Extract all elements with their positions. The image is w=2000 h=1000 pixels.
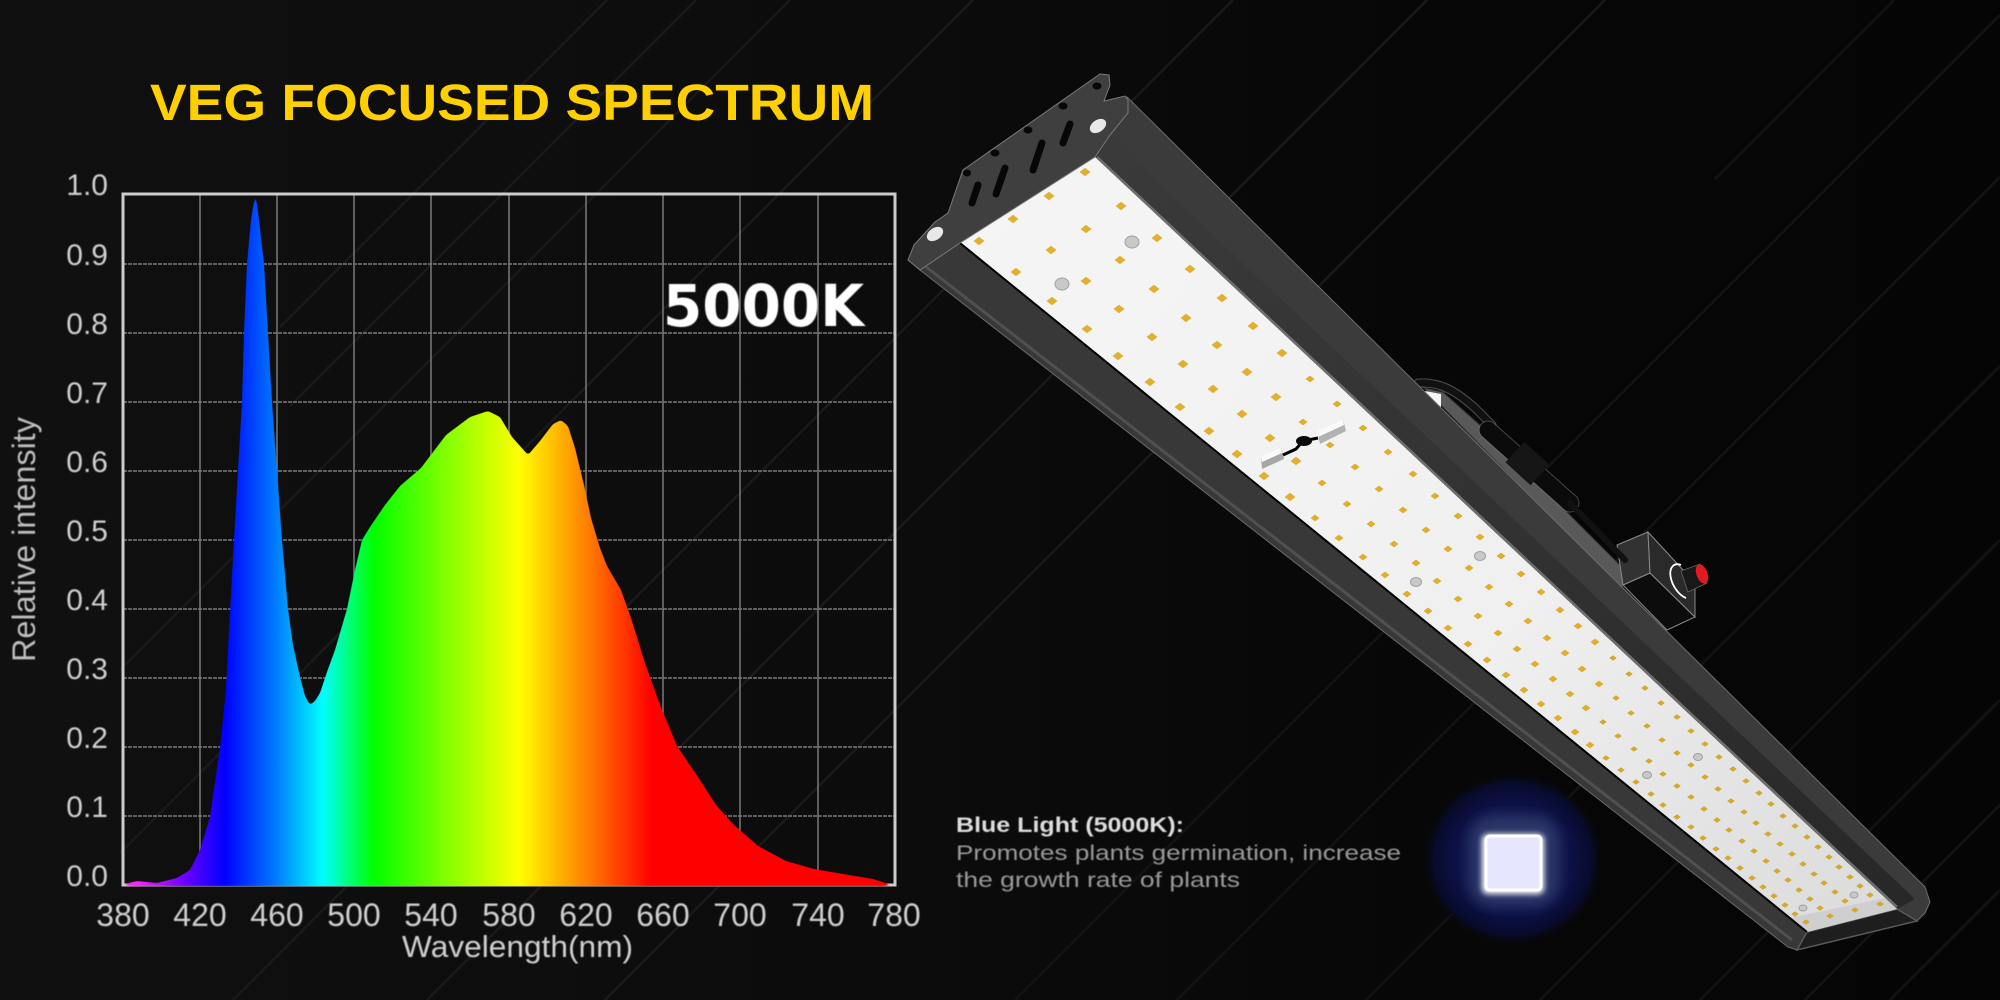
LED chips: middle: [1303, 379, 1599, 745]
panel edge lines: [960, 157, 1897, 932]
x axis labels: 420: [173, 897, 227, 933]
x axis labels: 460: [250, 897, 304, 933]
y axis labels: 0.8: [66, 308, 108, 341]
y axis labels: 0.7: [66, 377, 108, 410]
temperature label: 5000K: [663, 272, 866, 340]
panel end strip: [1790, 898, 1897, 932]
y axis labels: 0.9: [66, 239, 108, 272]
product: LED light bar: [908, 74, 1930, 950]
callout: blue light text: Blue Light (5000K):: [956, 814, 1184, 837]
x axis labels: 780: [867, 897, 921, 933]
callout: blue light text: [956, 814, 1401, 892]
power cable: [1418, 383, 1625, 560]
y axis labels: 0.5: [66, 515, 108, 548]
y axis labels: 0.2: [66, 722, 108, 755]
right side wall: [1095, 97, 1930, 921]
y axis labels: 0.0: [66, 860, 108, 893]
mounting bracket: [908, 74, 1128, 270]
lower wall highlight: [925, 266, 1792, 940]
y axis labels: 1.0: [66, 169, 108, 202]
bracket holes: [963, 82, 1102, 176]
panel cable clip: [1261, 419, 1346, 469]
x axis labels: 620: [559, 897, 613, 933]
x axis labels: 540: [404, 897, 458, 933]
x axis labels: 380: [96, 897, 150, 933]
x axis labels: [96, 897, 921, 933]
icon: glowing blue LED: [1423, 773, 1603, 945]
y axis labels: 0.1: [66, 791, 108, 824]
plot frame: [123, 194, 895, 885]
right wall inner fold: [1095, 137, 1915, 909]
x axis labels: 700: [713, 897, 767, 933]
end cap lip: [1797, 909, 1917, 950]
x axis labels: 740: [791, 897, 845, 933]
y axis labels: [66, 169, 108, 893]
y axis labels: 0.6: [66, 446, 108, 479]
callout: blue light text: Promotes plants germination, increase: [956, 842, 1401, 865]
y axis labels: 0.4: [66, 584, 108, 617]
x axis labels: 660: [636, 897, 690, 933]
LED panel: [960, 157, 1897, 932]
cable side strip: [1416, 380, 1625, 590]
dimmer knob: [1670, 563, 1711, 598]
x axis labels: 500: [327, 897, 381, 933]
y axis title: Relative intensity: [6, 417, 42, 662]
bracket white rivets: [924, 116, 1109, 244]
plot gridlines: [123, 194, 895, 885]
title: VEG FOCUSED SPECTRUM: [150, 74, 874, 131]
spectrum curve: [123, 192, 895, 886]
LED chips: far end: [1603, 658, 1880, 922]
callout: blue light text: the growth rate of plants: [956, 869, 1240, 892]
mounting screws: [1055, 236, 1858, 911]
bracket slots: [972, 124, 1070, 203]
y axis labels: 0.3: [66, 653, 108, 686]
x axis title: Wavelength(nm): [402, 929, 633, 964]
x axis labels: 580: [482, 897, 536, 933]
lower side wall: [908, 243, 1807, 950]
spectrum chart: [6, 169, 921, 964]
LED chips: near end: [979, 172, 1296, 497]
control box: [1617, 532, 1695, 630]
